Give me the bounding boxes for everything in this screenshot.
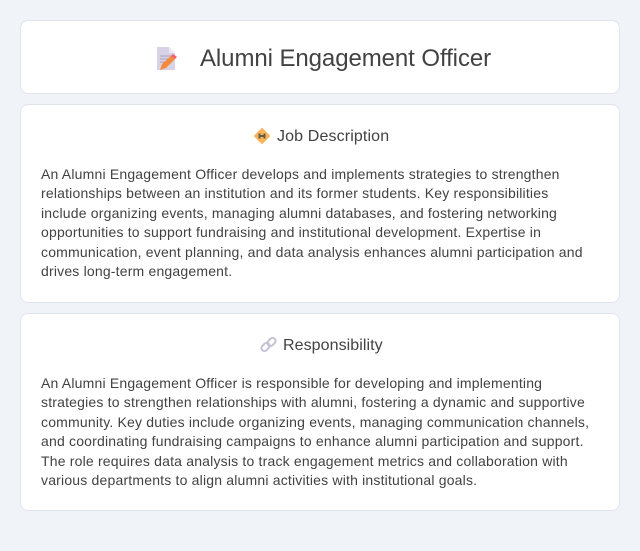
text block: job description: include organizing events, managing alumni databases, and fostering networking [41,205,557,221]
text block: responsibility: and coordinating fundraising campaigns to enhance alumni participation and support. [41,433,584,449]
text block: job description: opportunities to support fundraising and institutional development. Expertise in [41,224,541,240]
text block: responsibility: strategies to strengthen relationships with alumni, fostering a dynamic and supportive [41,394,585,410]
text block: responsibility: The role requires data analysis to track engagement metrics and collaboration with [41,453,568,469]
text block: job description: communication, event planning, and data analysis enhances alumni participation and [41,244,583,260]
icon: document with pencil [157,47,177,70]
panel: title card [20,20,620,94]
text block: job description: relationships between an institution and its former students. Key responsibilities [41,185,548,201]
panel: responsibility [20,313,620,511]
text block: responsibility: various departments to align alumni activities with institutional goals. [41,472,477,488]
icon: chain link [260,337,276,352]
text block: job description: drives long-term engagement. [41,263,232,279]
icon: diamond badge [254,128,270,144]
panel: job description [20,104,620,303]
text block: job description: An Alumni Engagement Officer develops and implements strategies to strengthen [41,166,560,182]
title: Alumni Engagement Officer [200,45,491,72]
heading: job description: Job Description [277,128,389,145]
heading: responsibility: Responsibility [283,337,383,354]
text block: responsibility: community. Key duties include organizing events, managing communication channels, [41,414,589,430]
text block: responsibility: An Alumni Engagement Officer is responsible for developing and implementing [41,375,542,391]
